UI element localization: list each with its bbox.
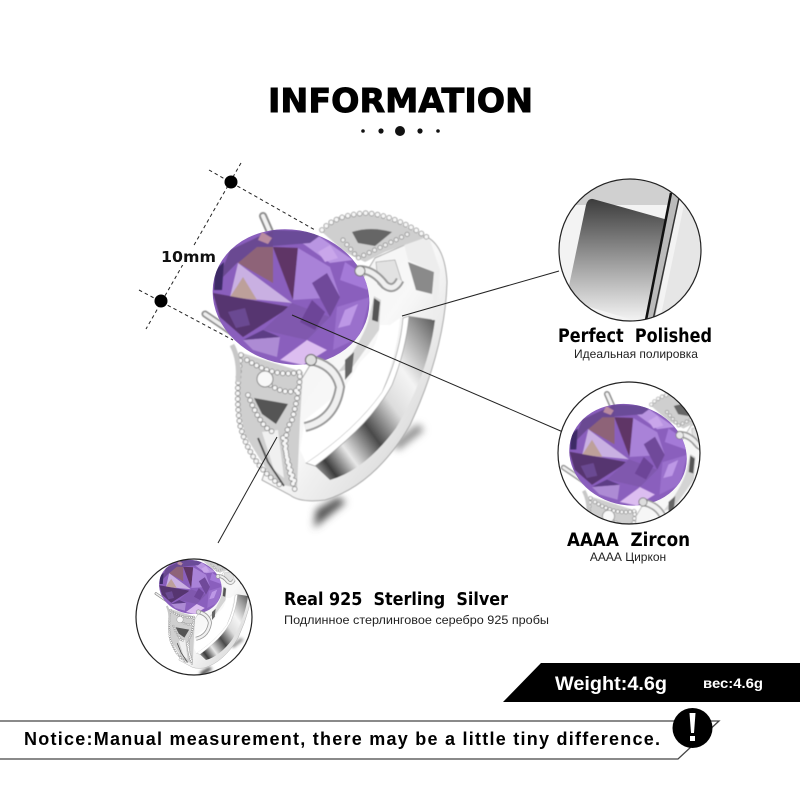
caption: sterling silver: Real 925 Sterling Silver bbox=[284, 590, 508, 610]
caption: sterling silver: Подлинное стерлинговое серебро 925 пробы bbox=[284, 613, 549, 627]
caption: perfect polished: Perfect Polished bbox=[558, 326, 712, 347]
weight banner bbox=[503, 663, 800, 702]
circle: whole ring thumbnail bbox=[135, 558, 253, 676]
weight banner: вес:4.6g bbox=[703, 675, 763, 691]
icon: exclamation mark bbox=[672, 708, 712, 748]
notice box: Notice:Manual measurement, there may be a little tiny difference. bbox=[24, 729, 660, 749]
caption: perfect polished: Идеальная полировка bbox=[574, 347, 698, 361]
title dots bbox=[361, 126, 440, 136]
caption: zircon: AAAA Zircon bbox=[567, 530, 690, 551]
caption: zircon bbox=[567, 530, 690, 564]
circle: zircon detail bbox=[557, 381, 701, 525]
main ring photo bbox=[198, 213, 447, 528]
caption: perfect polished bbox=[558, 326, 712, 361]
notice box bbox=[0, 721, 719, 759]
circle: polished detail bbox=[555, 175, 705, 325]
caption: sterling silver bbox=[284, 590, 549, 627]
10mm dimension marker: 10mm bbox=[161, 248, 216, 266]
caption: zircon: АААА Циркон bbox=[590, 550, 666, 564]
title: INFORMATION bbox=[268, 81, 533, 120]
leader lines bbox=[218, 271, 563, 543]
10mm dimension marker bbox=[139, 163, 315, 340]
weight banner: Weight:4.6g bbox=[555, 674, 667, 695]
